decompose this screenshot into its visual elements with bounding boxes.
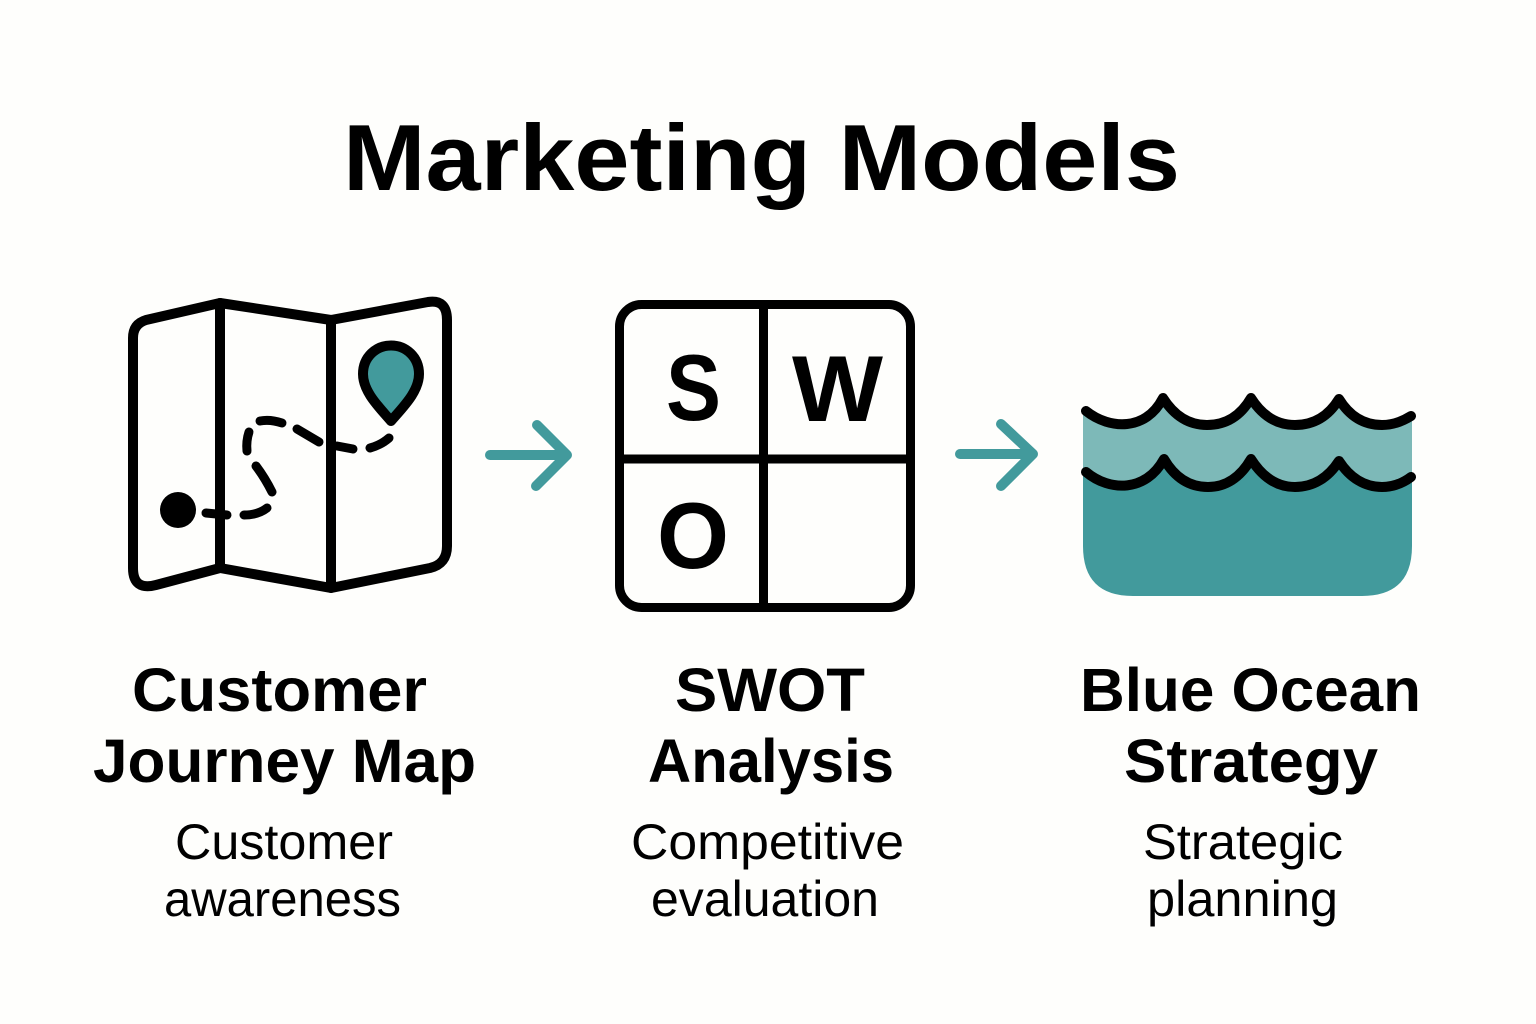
description: competitive evaluation: Competitive xyxy=(631,814,904,870)
heading: customer journey map: Journey Map xyxy=(93,727,476,795)
arrow: map to swot xyxy=(490,425,567,486)
letter w: W xyxy=(792,336,883,441)
description: strategic planning: planning xyxy=(1147,871,1338,927)
grid dividers xyxy=(619,304,910,608)
title: Marketing Models xyxy=(343,105,1180,210)
location pin xyxy=(363,346,419,421)
heading: swot analysis xyxy=(648,656,894,795)
panel: customer journey map xyxy=(93,302,476,927)
letter o: O xyxy=(657,483,729,588)
icon: ocean waves xyxy=(1083,398,1412,596)
dashed route xyxy=(206,420,389,515)
grid frame xyxy=(620,304,910,608)
heading: customer journey map: Customer xyxy=(132,656,427,724)
heading: swot analysis: Analysis xyxy=(648,727,894,795)
description: competitive evaluation xyxy=(631,814,904,927)
top wave line xyxy=(1086,398,1411,425)
heading: blue ocean strategy xyxy=(1080,656,1421,795)
map fold right xyxy=(326,320,336,588)
heading: blue ocean strategy: Blue Ocean xyxy=(1080,656,1421,724)
deep water body xyxy=(1083,459,1412,596)
start dot xyxy=(160,492,196,528)
icon: folded map xyxy=(133,302,447,588)
panel: blue ocean strategy xyxy=(1080,398,1421,927)
description: strategic planning: Strategic xyxy=(1143,814,1343,870)
arrow: swot to ocean xyxy=(960,424,1033,486)
letter s: S xyxy=(666,335,721,440)
map fold left xyxy=(215,303,225,568)
description: customer awareness: awareness xyxy=(164,871,401,927)
icon: swot grid xyxy=(619,304,910,608)
light water band xyxy=(1083,398,1412,500)
heading: swot analysis: SWOT xyxy=(675,656,865,724)
heading: customer journey map xyxy=(93,656,476,795)
description: customer awareness: Customer xyxy=(175,814,393,870)
map outline xyxy=(133,302,447,588)
panel: swot analysis xyxy=(619,304,910,927)
description: customer awareness xyxy=(164,814,401,927)
heading: blue ocean strategy: Strategy xyxy=(1124,727,1378,795)
description: competitive evaluation: evaluation xyxy=(651,871,879,927)
lower wave line xyxy=(1086,459,1411,487)
description: strategic planning xyxy=(1143,814,1343,927)
